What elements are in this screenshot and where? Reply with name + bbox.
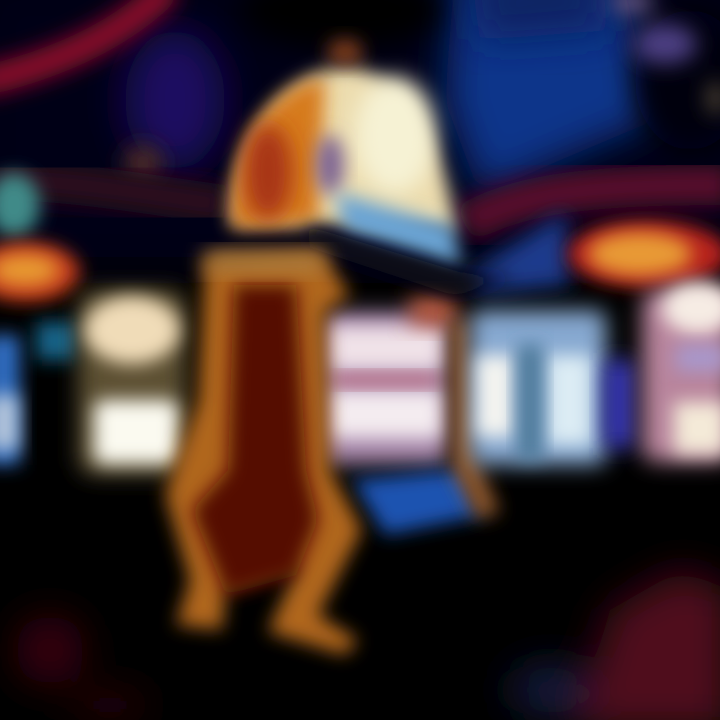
ceiling background bbox=[0, 0, 720, 270]
slot machine centre bbox=[322, 296, 456, 464]
slot machine far left bbox=[0, 322, 78, 465]
slot machine right bbox=[470, 310, 634, 465]
red ceiling arc bbox=[0, 0, 170, 82]
slot machine far right bbox=[642, 282, 720, 462]
blue machine base bbox=[352, 468, 480, 535]
left wall lights bbox=[0, 173, 80, 302]
machine side post bbox=[450, 320, 500, 520]
ceiling lights bbox=[123, 0, 720, 181]
floor carpet bbox=[15, 570, 720, 720]
dark red bands bbox=[0, 180, 720, 295]
orange character bbox=[165, 252, 362, 655]
right orange oval bbox=[568, 221, 720, 287]
slot machine left bbox=[78, 290, 186, 475]
dome lamp bbox=[232, 39, 515, 296]
